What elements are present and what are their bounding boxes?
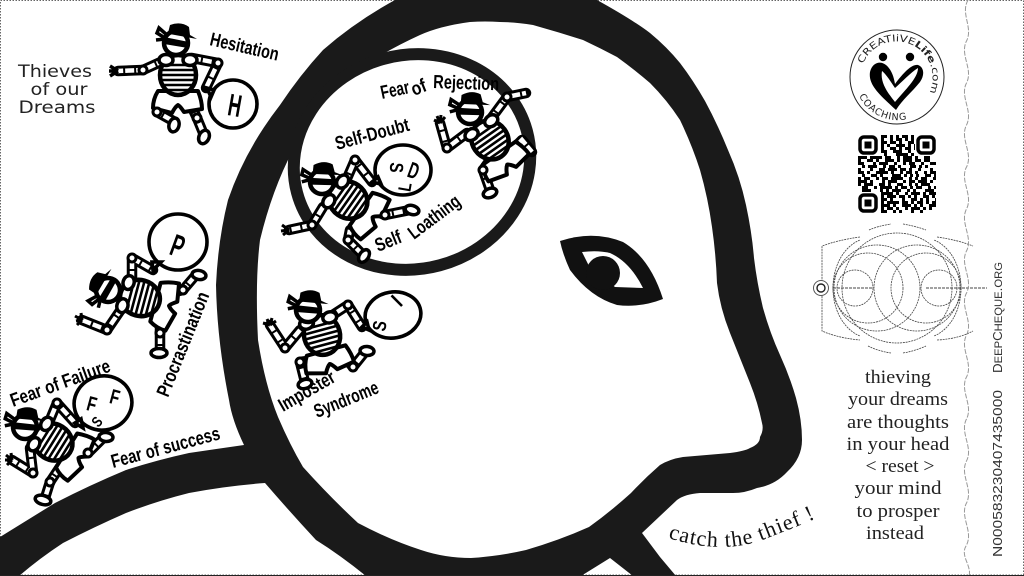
thief: Self-Doubt and Self Loathing: Self-Doubt: [333, 115, 412, 155]
thief: Self-Doubt and Self Loathing: [281, 115, 465, 264]
poem: thieving your dreams: instead: [866, 523, 925, 544]
logo: CreatiiveLife coaching: CREATIiVELife.com: [858, 34, 938, 93]
poem: thieving your dreams: [846, 367, 950, 544]
logo: CreatiiveLife coaching: COACHING: [860, 94, 906, 120]
QR code: [858, 136, 936, 212]
title: Thieves of our Dreams: Dreams: [18, 98, 96, 118]
label: Self Loathing: Self: [372, 227, 405, 257]
title: Thieves of our Dreams: Thieves: [17, 62, 92, 82]
bottom edge line: [0, 574, 1024, 576]
concentric dashed circles diagram: [814, 224, 987, 353]
thief: Fear of Failure and Fear of Success: [3, 356, 222, 506]
poem: thieving your dreams: in your head: [846, 434, 950, 455]
thief: Fear of Rejection: [379, 72, 532, 200]
money bag F S F: F: [84, 391, 100, 417]
title: Thieves of our Dreams: of our: [30, 80, 88, 100]
label: Imposter Syndrome: Syndrome: [311, 378, 382, 423]
poem: thieving your dreams: your mind: [854, 478, 942, 499]
money bag H: H: [225, 88, 244, 124]
money bag S I: I: [387, 291, 408, 312]
money bag S I: [361, 287, 425, 343]
poem: thieving your dreams: your dreams: [848, 389, 948, 410]
thief: Procrastination: [75, 214, 214, 400]
money bag H: [207, 80, 257, 128]
thief: Fear of Failure and Fear of Success: Fear of Failure: [8, 356, 113, 412]
eye: [560, 236, 663, 306]
vertical text: cheque number: N000583230407435000: [990, 390, 1005, 557]
thief: Hesitation: [109, 23, 281, 145]
caption: catch the thief: catch the thief !: [670, 506, 814, 547]
money bag SD L: [372, 145, 431, 195]
money bag SD L: L: [395, 181, 416, 193]
money bag SD L: D: [404, 158, 422, 185]
thief: Hesitation: Hesitation: [208, 29, 281, 66]
money bag SD L: S: [385, 162, 408, 174]
money bag F S F: F: [107, 384, 123, 410]
title: Thieves of our Dreams: [17, 62, 96, 118]
thief: Imposter Syndrome: [263, 287, 425, 423]
label: Self Loathing: Loathing: [404, 191, 465, 244]
label: Imposter Syndrome: Imposter: [275, 367, 340, 416]
label: Imposter Syndrome: [275, 367, 382, 423]
logo: CreatiiveLife coaching: [850, 30, 944, 124]
label: Fear of Rejection: Rejection: [433, 72, 500, 95]
wavy tear line: [964, 0, 969, 576]
poem: thieving your dreams: < reset >: [866, 456, 934, 477]
money bag P: [149, 214, 207, 270]
label: Fear of Rejection: [379, 72, 500, 104]
thief: Fear of Failure and Fear of Success: Fear of success: [109, 424, 222, 473]
label: Fear of Rejection: of: [408, 75, 430, 101]
money bag F S F: S: [88, 413, 106, 430]
poem: thieving your dreams: are thoughts: [847, 412, 949, 433]
poem: thieving your dreams: thieving: [865, 367, 932, 388]
label: Fear of Rejection: Fear: [379, 77, 412, 104]
money bag F S F: [68, 369, 138, 437]
label: Self Loathing: [372, 191, 465, 257]
magnifier ring in the head: [269, 28, 555, 296]
vertical text: DeepCheque.org: DEEPCHEQUE.ORG: [990, 262, 1005, 373]
thief: Procrastination: Procrastination: [153, 289, 214, 400]
poem: thieving your dreams: to prosper: [856, 501, 940, 522]
money bag S I: S: [368, 319, 391, 333]
head outline with neck and shoulder: [0, 0, 802, 576]
money bag P: P: [166, 229, 189, 265]
target icon: [814, 280, 828, 296]
